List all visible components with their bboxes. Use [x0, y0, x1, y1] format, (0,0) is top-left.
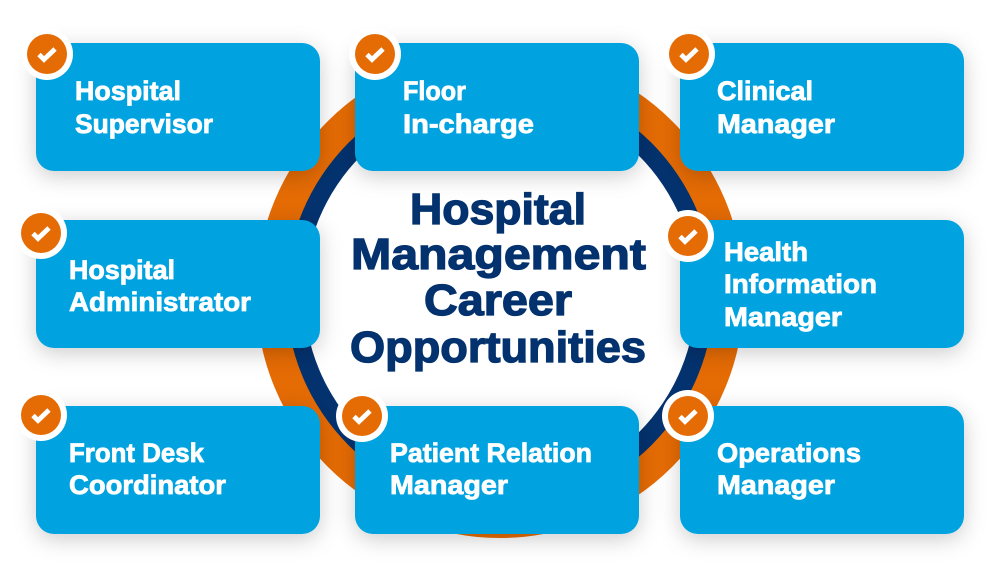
title: Management	[351, 230, 646, 279]
card: Hospital Supervisor: Hospital	[75, 76, 181, 106]
card: Floor In-charge: In-charge	[403, 109, 534, 139]
title	[350, 185, 646, 372]
title: Hospital	[410, 185, 586, 234]
title: Career	[424, 276, 572, 325]
card: Hospital Supervisor: Supervisor	[75, 109, 213, 139]
card: Health Information Manager: Health	[724, 237, 808, 267]
card: Floor In-charge: Floor	[403, 76, 466, 106]
card: Operations Manager: Manager	[717, 470, 836, 500]
card: Operations Manager	[662, 390, 964, 534]
ring: orange and navy circle	[256, 50, 744, 538]
card: Clinical Manager: Manager	[717, 109, 836, 139]
card: Hospital Administrator: Administrator	[69, 287, 251, 317]
card: Front Desk Coordinator: Coordinator	[69, 470, 226, 500]
card: Clinical Manager	[663, 28, 964, 171]
card: Hospital Administrator	[15, 207, 320, 348]
card: Health Information Manager: Information	[724, 269, 877, 299]
card: Front Desk Coordinator: Front Desk	[69, 438, 205, 468]
card: Operations Manager: Operations	[717, 438, 861, 468]
card: Front Desk Coordinator	[15, 389, 320, 534]
card: Clinical Manager: Clinical	[717, 76, 813, 106]
card: Patient Relation Manager: Patient Relation	[390, 438, 592, 468]
card: Floor In-charge	[349, 28, 639, 171]
card: Patient Relation Manager: Manager	[390, 470, 509, 500]
card: Hospital Administrator: Hospital	[69, 255, 175, 285]
card: Health Information Manager: Manager	[724, 302, 843, 332]
card: Patient Relation Manager	[336, 390, 639, 534]
card: Health Information Manager	[662, 210, 964, 348]
title: Opportunities	[350, 323, 646, 372]
card: Hospital Supervisor	[21, 28, 320, 171]
